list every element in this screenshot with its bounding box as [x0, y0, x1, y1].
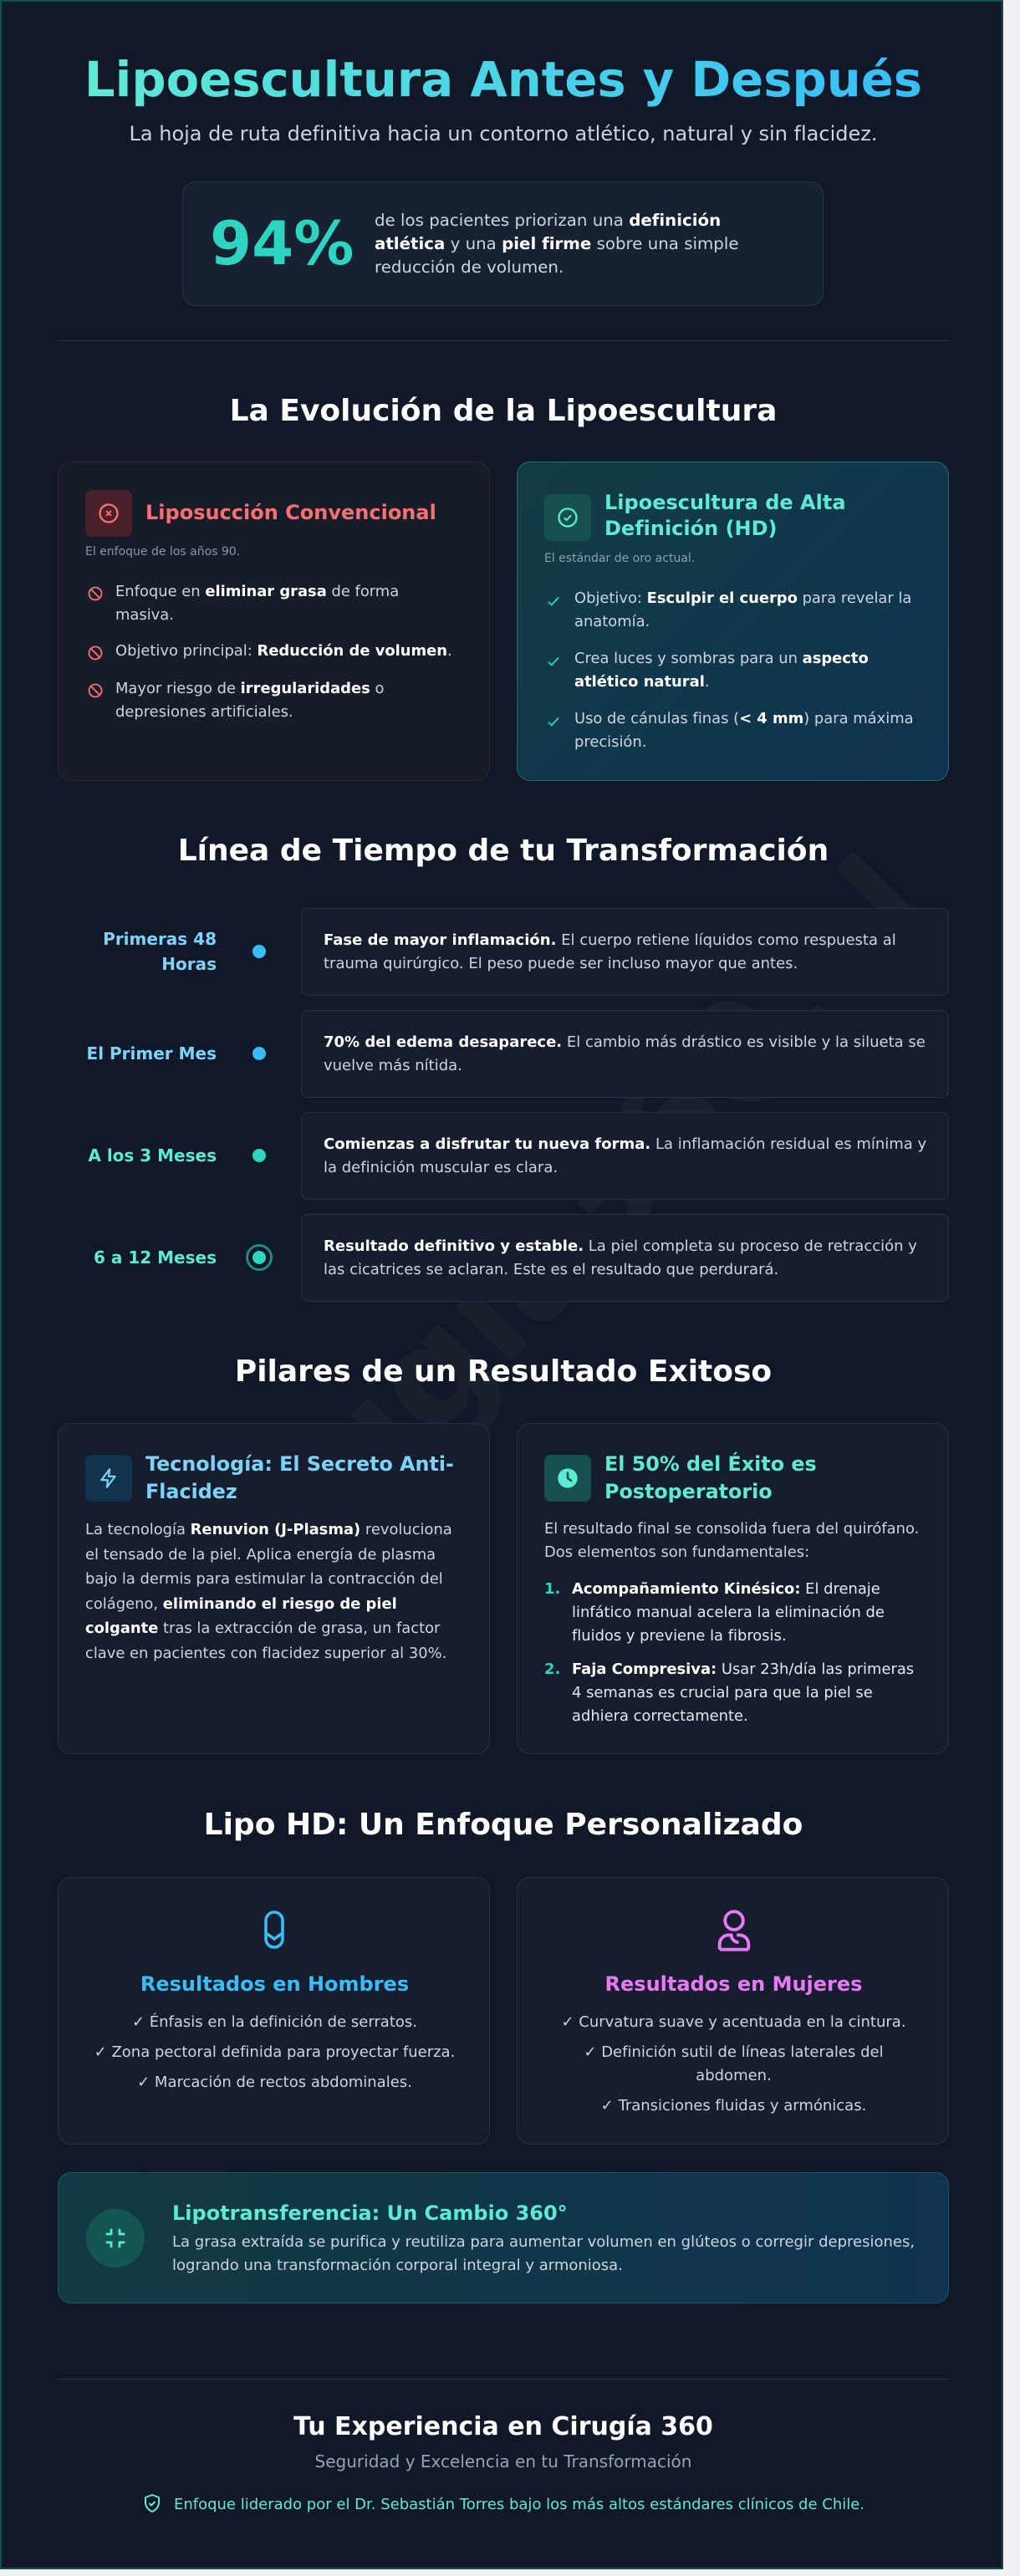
panel: men — [58, 1877, 490, 2145]
card title: Definición (HD) — [604, 517, 778, 540]
list: ✓ Énfasis en la definición de serratos. — [132, 2013, 417, 2031]
list: ✓ Curvatura suave y acentuada en la cintura. — [561, 2013, 906, 2031]
list: abdomen. — [696, 2067, 772, 2084]
stat number: 94% — [210, 208, 354, 278]
icon: check circle — [544, 494, 591, 541]
body text: La tecnología Renuvion (J-Plasma) revoluciona — [85, 1521, 452, 1538]
heading: pillars: Pilares de un Resultado Exitoso — [235, 1354, 772, 1389]
timeline row 1: Primeras 48 — [103, 929, 217, 949]
check list: precisión. — [574, 733, 646, 751]
body text: el tensado de la piel. Aplica energía de plasma — [85, 1545, 436, 1563]
list: ✓ Transiciones fluidas y armónicas. — [601, 2097, 866, 2114]
bullet list: Enfoque en eliminar grasa de forma — [115, 583, 399, 600]
check list: atlético natural. — [574, 673, 710, 691]
card subtext: El enfoque de los años 90. — [85, 545, 240, 559]
card title — [604, 491, 846, 540]
timeline row 2: vuelve más nítida. — [324, 1057, 462, 1074]
stat box — [182, 181, 824, 306]
panel: HD liposculpture — [517, 462, 949, 781]
timeline row 2 — [87, 1010, 949, 1098]
stat text: reducción de volumen. — [375, 258, 564, 277]
list: ✓ Zona pectoral definida para proyectar fuerza. — [94, 2043, 455, 2061]
check list: Objetivo: Esculpir el cuerpo para revelar la — [574, 589, 911, 607]
body text: clave en pacientes con flacidez superior al 30%. — [85, 1644, 446, 1662]
timeline row 4 — [94, 1214, 949, 1302]
body text — [544, 1520, 919, 1561]
card title: Postoperatorio — [604, 1480, 773, 1503]
timeline row 3: Comienzas a disfrutar tu nueva forma. La inflamación residual es mínima y — [324, 1135, 926, 1153]
check list — [548, 589, 914, 751]
timeline row 1: Fase de mayor inflamación. El cuerpo retiene líquidos como respuesta al — [324, 931, 896, 949]
card title — [604, 1451, 817, 1503]
panel: postoperative — [517, 1423, 949, 1754]
bullet list: masiva. — [115, 606, 174, 624]
check list: Uso de cánulas finas (< 4 mm) para máxima — [574, 710, 914, 727]
check list: anatomía. — [574, 613, 650, 630]
body text: colgante tras la extracción de grasa, un factor — [85, 1620, 440, 1637]
panel: conventional liposuction — [58, 462, 490, 781]
card subtext: El estándar de oro actual. — [544, 552, 695, 565]
numbered list: 4 semanas es crucial para que la piel se — [572, 1684, 873, 1701]
watermark: cirugia360.cl — [126, 826, 964, 1686]
list — [94, 2013, 455, 2091]
numbered list: linfático manual acelera la eliminación de — [572, 1604, 885, 1621]
body text: Dos elementos son fundamentales: — [544, 1543, 809, 1561]
timeline row 4: 6 a 12 Meses — [94, 1247, 217, 1268]
icon: female figure — [717, 1910, 751, 1951]
list: ✓ Definición sutil de líneas laterales del — [584, 2043, 884, 2061]
timeline row 2: 70% del edema desaparece. El cambio más drástico es visible y la silueta se — [324, 1033, 926, 1051]
timeline row 1: Horas — [161, 954, 217, 974]
icon: clock — [544, 1455, 591, 1502]
body text: colágeno, eliminando el riesgo de piel — [85, 1595, 397, 1612]
footer credit: Enfoque liderado por el Dr. Sebastián Torres bajo los más altos estándares clínicos de Chile. — [174, 2496, 864, 2513]
callout body — [172, 2233, 915, 2274]
stat text: de los pacientes priorizan una definición — [375, 211, 721, 230]
numbered list: 1. — [544, 1580, 560, 1598]
footer subtitle: Seguridad y Excelencia en tu Transformación — [315, 2451, 691, 2471]
timeline — [87, 908, 949, 1302]
bullet list: depresiones artificiales. — [115, 703, 293, 721]
card title: Resultados en Hombres — [140, 1972, 409, 1996]
numbered list: Acompañamiento Kinésico: El drenaje — [572, 1580, 880, 1598]
heading: personalized: Lipo HD: Un Enfoque Personalizado — [204, 1808, 803, 1842]
icon: compress arrows — [86, 2209, 145, 2267]
card title — [145, 1452, 454, 1503]
timeline row 2: El Primer Mes — [87, 1043, 217, 1064]
numbered list: fluidos y previene la fibrosis. — [572, 1627, 787, 1645]
body text: El resultado final se consolida fuera del quirófano. — [544, 1520, 919, 1538]
timeline row 3 — [88, 1112, 949, 1200]
timeline row 3: la definición muscular es clara. — [324, 1159, 558, 1176]
callout body: La grasa extraída se purifica y reutiliza para aumentar volumen en glúteos o corregir depresiones, — [172, 2233, 915, 2251]
stat text: atlética y una piel firme sobre una simple — [375, 234, 738, 253]
numbered list: Faja Compresiva: Usar 23h/día las primeras — [572, 1660, 914, 1678]
panel: technology — [58, 1423, 490, 1754]
list: ✓ Marcación de rectos abdominales. — [137, 2074, 412, 2091]
body text — [85, 1521, 452, 1662]
timeline row 1: trauma quirúrgico. El peso puede ser incluso mayor que antes. — [324, 955, 798, 972]
card title: Resultados en Mujeres — [605, 1972, 862, 1996]
bullet list — [89, 583, 452, 721]
footer title: Tu Experiencia en Cirugía 360 — [293, 2412, 713, 2441]
icon: lightning — [85, 1455, 132, 1502]
callout body: logrando una transformación corporal integral y armoniosa. — [172, 2257, 623, 2274]
heading: evolution: La Evolución de la Lipoescultura — [230, 394, 777, 428]
card title: Lipoescultura de Alta — [604, 491, 846, 514]
body text: bajo la dermis para estimular la contracción del — [85, 1570, 443, 1588]
stat text — [375, 211, 738, 277]
list — [561, 2013, 906, 2114]
bullet list: Objetivo principal: Reducción de volumen. — [115, 642, 452, 660]
check list: Crea luces y sombras para un aspecto — [574, 650, 869, 667]
timeline row 1 — [103, 908, 949, 996]
callout title: Lipotransferencia: Un Cambio 360° — [172, 2201, 568, 2225]
callout: lipotransfer — [58, 2172, 949, 2303]
title: Lipoescultura Antes y Después — [84, 52, 922, 108]
card title: Liposucción Convencional — [145, 501, 436, 524]
timeline row 3: A los 3 Meses — [88, 1145, 217, 1166]
timeline row 4: las cicatrices se aclaran. Este es el resultado que perdurará. — [324, 1261, 778, 1278]
card title: El 50% del Éxito es — [604, 1452, 817, 1476]
bullet list: Mayor riesgo de irregularidades o — [115, 680, 384, 697]
heading: timeline: Línea de Tiempo de tu Transformación — [178, 834, 829, 868]
timeline row 4: Resultado definitivo y estable. La piel completa su proceso de retracción y — [324, 1237, 917, 1255]
subtitle: La hoja de ruta definitiva hacia un contorno atlético, natural y sin flacidez. — [130, 122, 877, 145]
icon: male figure — [264, 1910, 284, 1949]
card title: Flacidez — [145, 1480, 237, 1503]
card title: Tecnología: El Secreto Anti- — [145, 1452, 454, 1476]
numbered list — [544, 1580, 914, 1725]
icon: x circle — [85, 490, 132, 537]
panel: women — [517, 1877, 949, 2145]
numbered list: 2. — [544, 1660, 560, 1678]
numbered list: adhiera correctamente. — [572, 1707, 748, 1725]
